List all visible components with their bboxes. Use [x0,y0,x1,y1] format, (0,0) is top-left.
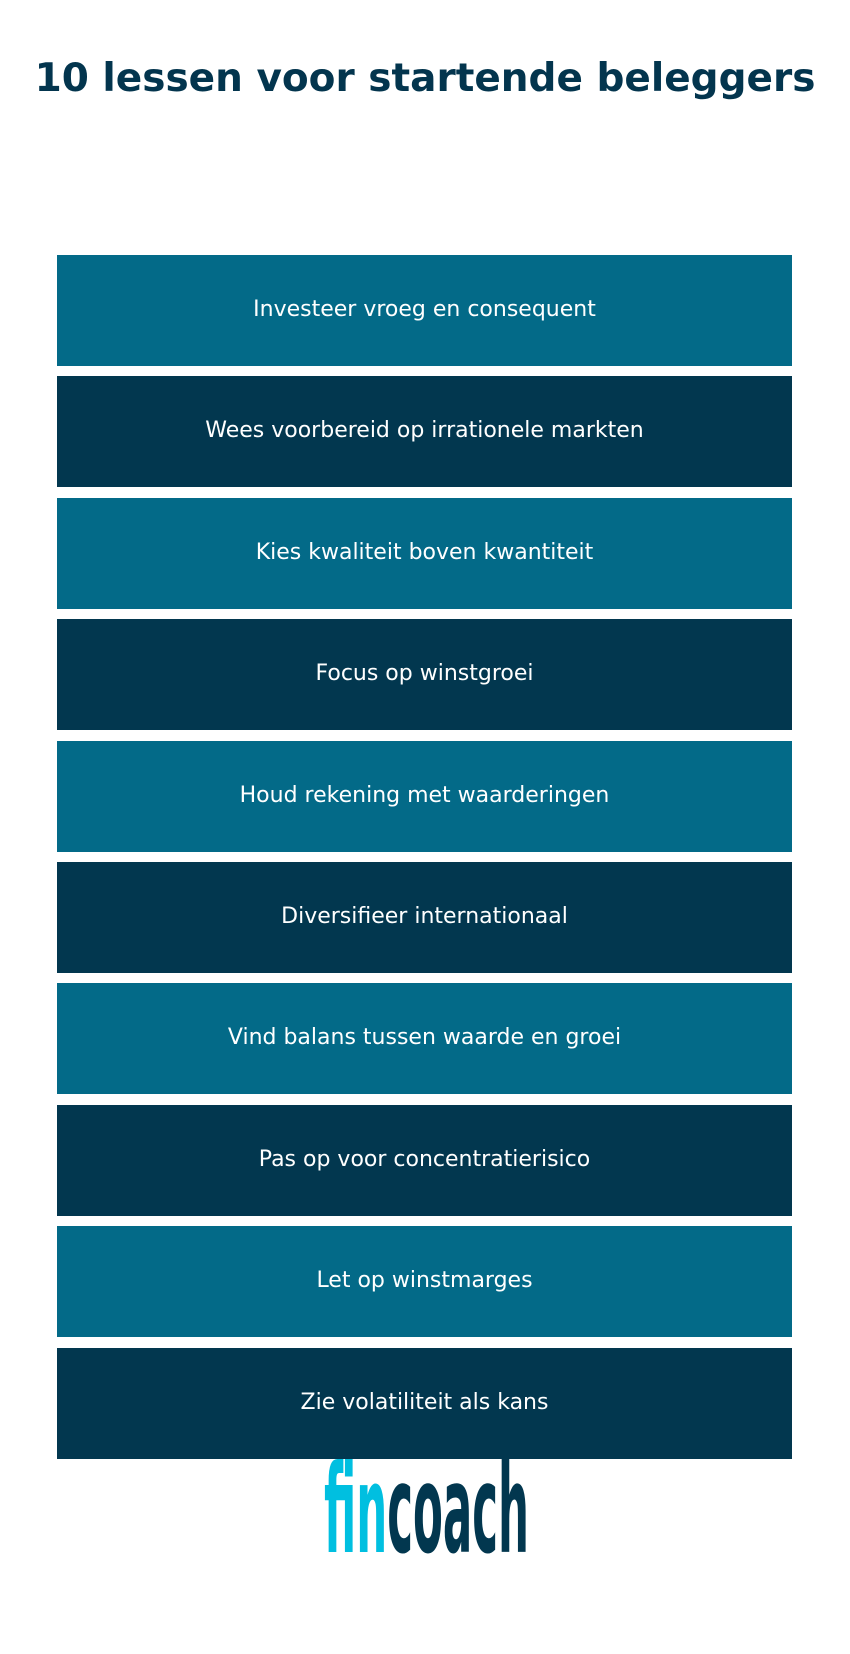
lesson 2: Wees voorbereid op irrationele markten [205,418,644,443]
lesson 4: Focus op winstgroei [315,661,534,686]
title: 10 lessen voor startende beleggers [35,56,815,101]
lesson 9 [57,1226,792,1337]
lesson 7: Vind balans tussen waarde en groei [228,1025,621,1050]
lesson 6: Diversifieer internationaal [281,904,568,929]
lesson 6 [57,862,792,973]
lesson 4 [57,619,792,730]
logo: fincoach: fincoach [324,1439,529,1581]
lesson 10: Zie volatiliteit als kans [301,1390,548,1415]
lesson 2 [57,376,792,487]
lesson 8 [57,1105,792,1216]
lesson 9: Let op winstmarges [316,1268,533,1293]
lesson 10 [57,1348,792,1459]
lesson 5: Houd rekening met waarderingen [240,783,609,808]
lesson 8: Pas op voor concentratierisico [259,1147,590,1172]
lesson 1: Investeer vroeg en consequent [253,297,596,322]
lesson 3 [57,498,792,609]
lesson 5 [57,741,792,852]
lesson 3: Kies kwaliteit boven kwantiteit [256,540,593,565]
lesson 1 [57,255,792,366]
lesson 7 [57,983,792,1094]
